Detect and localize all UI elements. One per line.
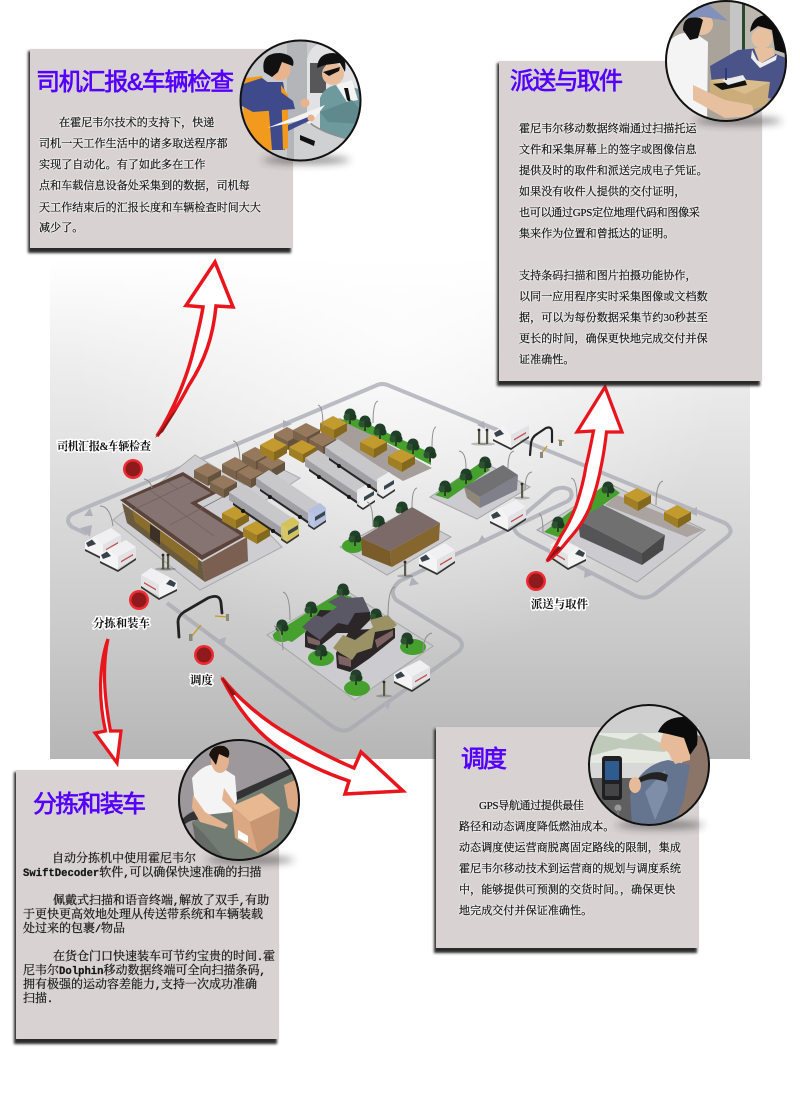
body text: 支持条码扫描和图片拍摄功能协作，	[519, 268, 697, 282]
body text: 霍尼韦尔移动数据终端通过扫描托运	[519, 121, 697, 135]
map label: dispatch: 调度	[190, 673, 213, 687]
body text: 处过来的包裹/物品	[23, 920, 125, 936]
body text: GPS导航通过提供最佳	[479, 798, 584, 812]
heading: 分拣和装车	[33, 791, 146, 818]
entry gates	[178, 428, 552, 637]
body text: 地完成交付并保证准确性。	[459, 903, 592, 917]
body text: 提供及时的取件和派送完成电子凭证。	[519, 163, 708, 177]
body text: 集来作为位置和曾抵达的证明。	[519, 226, 674, 240]
heading: 派送与取件	[510, 68, 623, 95]
location marker: delivery	[526, 571, 546, 591]
office building	[340, 502, 451, 575]
body text	[519, 121, 708, 366]
body text: 点和车载信息设备处采集到的数据，司机每	[39, 178, 250, 192]
arrow: up to delivery panel	[545, 387, 622, 563]
residential block	[267, 584, 433, 700]
small depot	[430, 456, 530, 519]
body text: 路径和动态调度降低燃油成本。	[459, 819, 614, 833]
body text: 据，可以为每份数据采集节约30秒甚至	[519, 310, 708, 324]
arrow: up to driver report panel	[155, 262, 233, 438]
delivery vans	[85, 418, 586, 692]
body text: 霍尼韦尔移动技术到运营商的规划与调度系统	[459, 861, 681, 875]
heading: 司机汇报&车辆检查	[36, 69, 234, 96]
dark warehouse	[537, 482, 705, 582]
body text: 中，能够提供可预测的交货时间。，确保更快	[459, 882, 676, 896]
body text: 以同一应用程序实时采集图像或文档数	[519, 289, 708, 303]
panel: delivery and pickup	[497, 61, 762, 386]
body text: 尼韦尔Dolphin移动数据终端可全向扫描条码,	[23, 962, 266, 978]
body text	[39, 115, 261, 234]
central warehouse building	[120, 472, 248, 582]
body text: 佩戴式扫描和语音终端,解放了双手,有助	[53, 892, 269, 908]
arrow: to dispatch panel	[220, 675, 403, 794]
body text: 在霍尼韦尔技术的支持下，快递	[59, 115, 214, 129]
body text: 动态调度使运营商脱离固定路线的限制，集成	[459, 840, 681, 854]
location marker: sorting	[129, 590, 149, 610]
road direction arrows	[80, 420, 697, 710]
gate barriers	[189, 440, 564, 641]
panel: dispatch	[434, 727, 699, 953]
body text: 如果没有收件人提供的交付证明，	[519, 184, 686, 198]
body text: 拥有极强的运动容差能力,支持一次成功准确	[23, 976, 257, 992]
gradient map background	[50, 260, 750, 759]
panel: sorting and loading	[14, 770, 279, 1044]
semi trucks	[229, 439, 395, 544]
body text: SwiftDecoder软件,可以确保快速准确的扫描	[23, 864, 261, 880]
body text: 扫描.	[23, 990, 53, 1006]
body text: 更长的时间，确保更快地完成交付并保	[519, 331, 708, 345]
body text: 于更快更高效地处理从传送带系统和车辆装载	[23, 906, 263, 922]
heading: 调度	[461, 746, 507, 773]
map label: driver report: 司机汇报&车辆检查	[57, 439, 152, 453]
logistics map illustration	[68, 384, 731, 731]
delivery road loop	[68, 384, 731, 731]
icon: sorting worker portrait	[176, 739, 304, 865]
icon: driver and inspector portrait	[240, 35, 365, 165]
people	[155, 429, 530, 698]
body text: 也可以通过GPS定位地理代码和图像采	[519, 205, 700, 219]
body text	[23, 850, 275, 1006]
body text	[459, 798, 681, 917]
body text: 自动分拣机中使用霍尼韦尔	[52, 850, 196, 866]
arrow: down to sorting panel	[95, 639, 121, 763]
location marker: dispatch	[194, 645, 214, 665]
body text: 减少了。	[39, 220, 83, 234]
location marker: driver report	[123, 459, 143, 479]
brown box stacks	[194, 423, 336, 498]
body text: 实现了自动化。有了如此多在工作	[39, 157, 206, 171]
icon: driver with handheld terminal portrait	[585, 703, 715, 830]
body text: 司机一天工作生活中的诸多取送程序都	[39, 136, 228, 150]
icon: courier and customer portrait	[662, 0, 790, 125]
body text: 证准确性。	[519, 352, 574, 366]
body text: 天工作结束后的汇报长度和车辆检查时间大大	[39, 200, 261, 214]
street lamps	[100, 401, 663, 653]
body text: 文件和采集屏幕上的签字或图像信息	[519, 142, 697, 156]
map label: delivery: 派送与取件	[531, 597, 589, 611]
body text: 在货仓门口快速装车可节约宝贵的时间.霍	[53, 948, 275, 964]
green lawn trees	[344, 408, 436, 462]
golden box stacks	[222, 416, 415, 544]
panel: driver report and vehicle inspection	[28, 49, 293, 253]
map label: sorting: 分拣和装车	[93, 616, 151, 630]
warehouse yard platforms	[113, 418, 432, 590]
